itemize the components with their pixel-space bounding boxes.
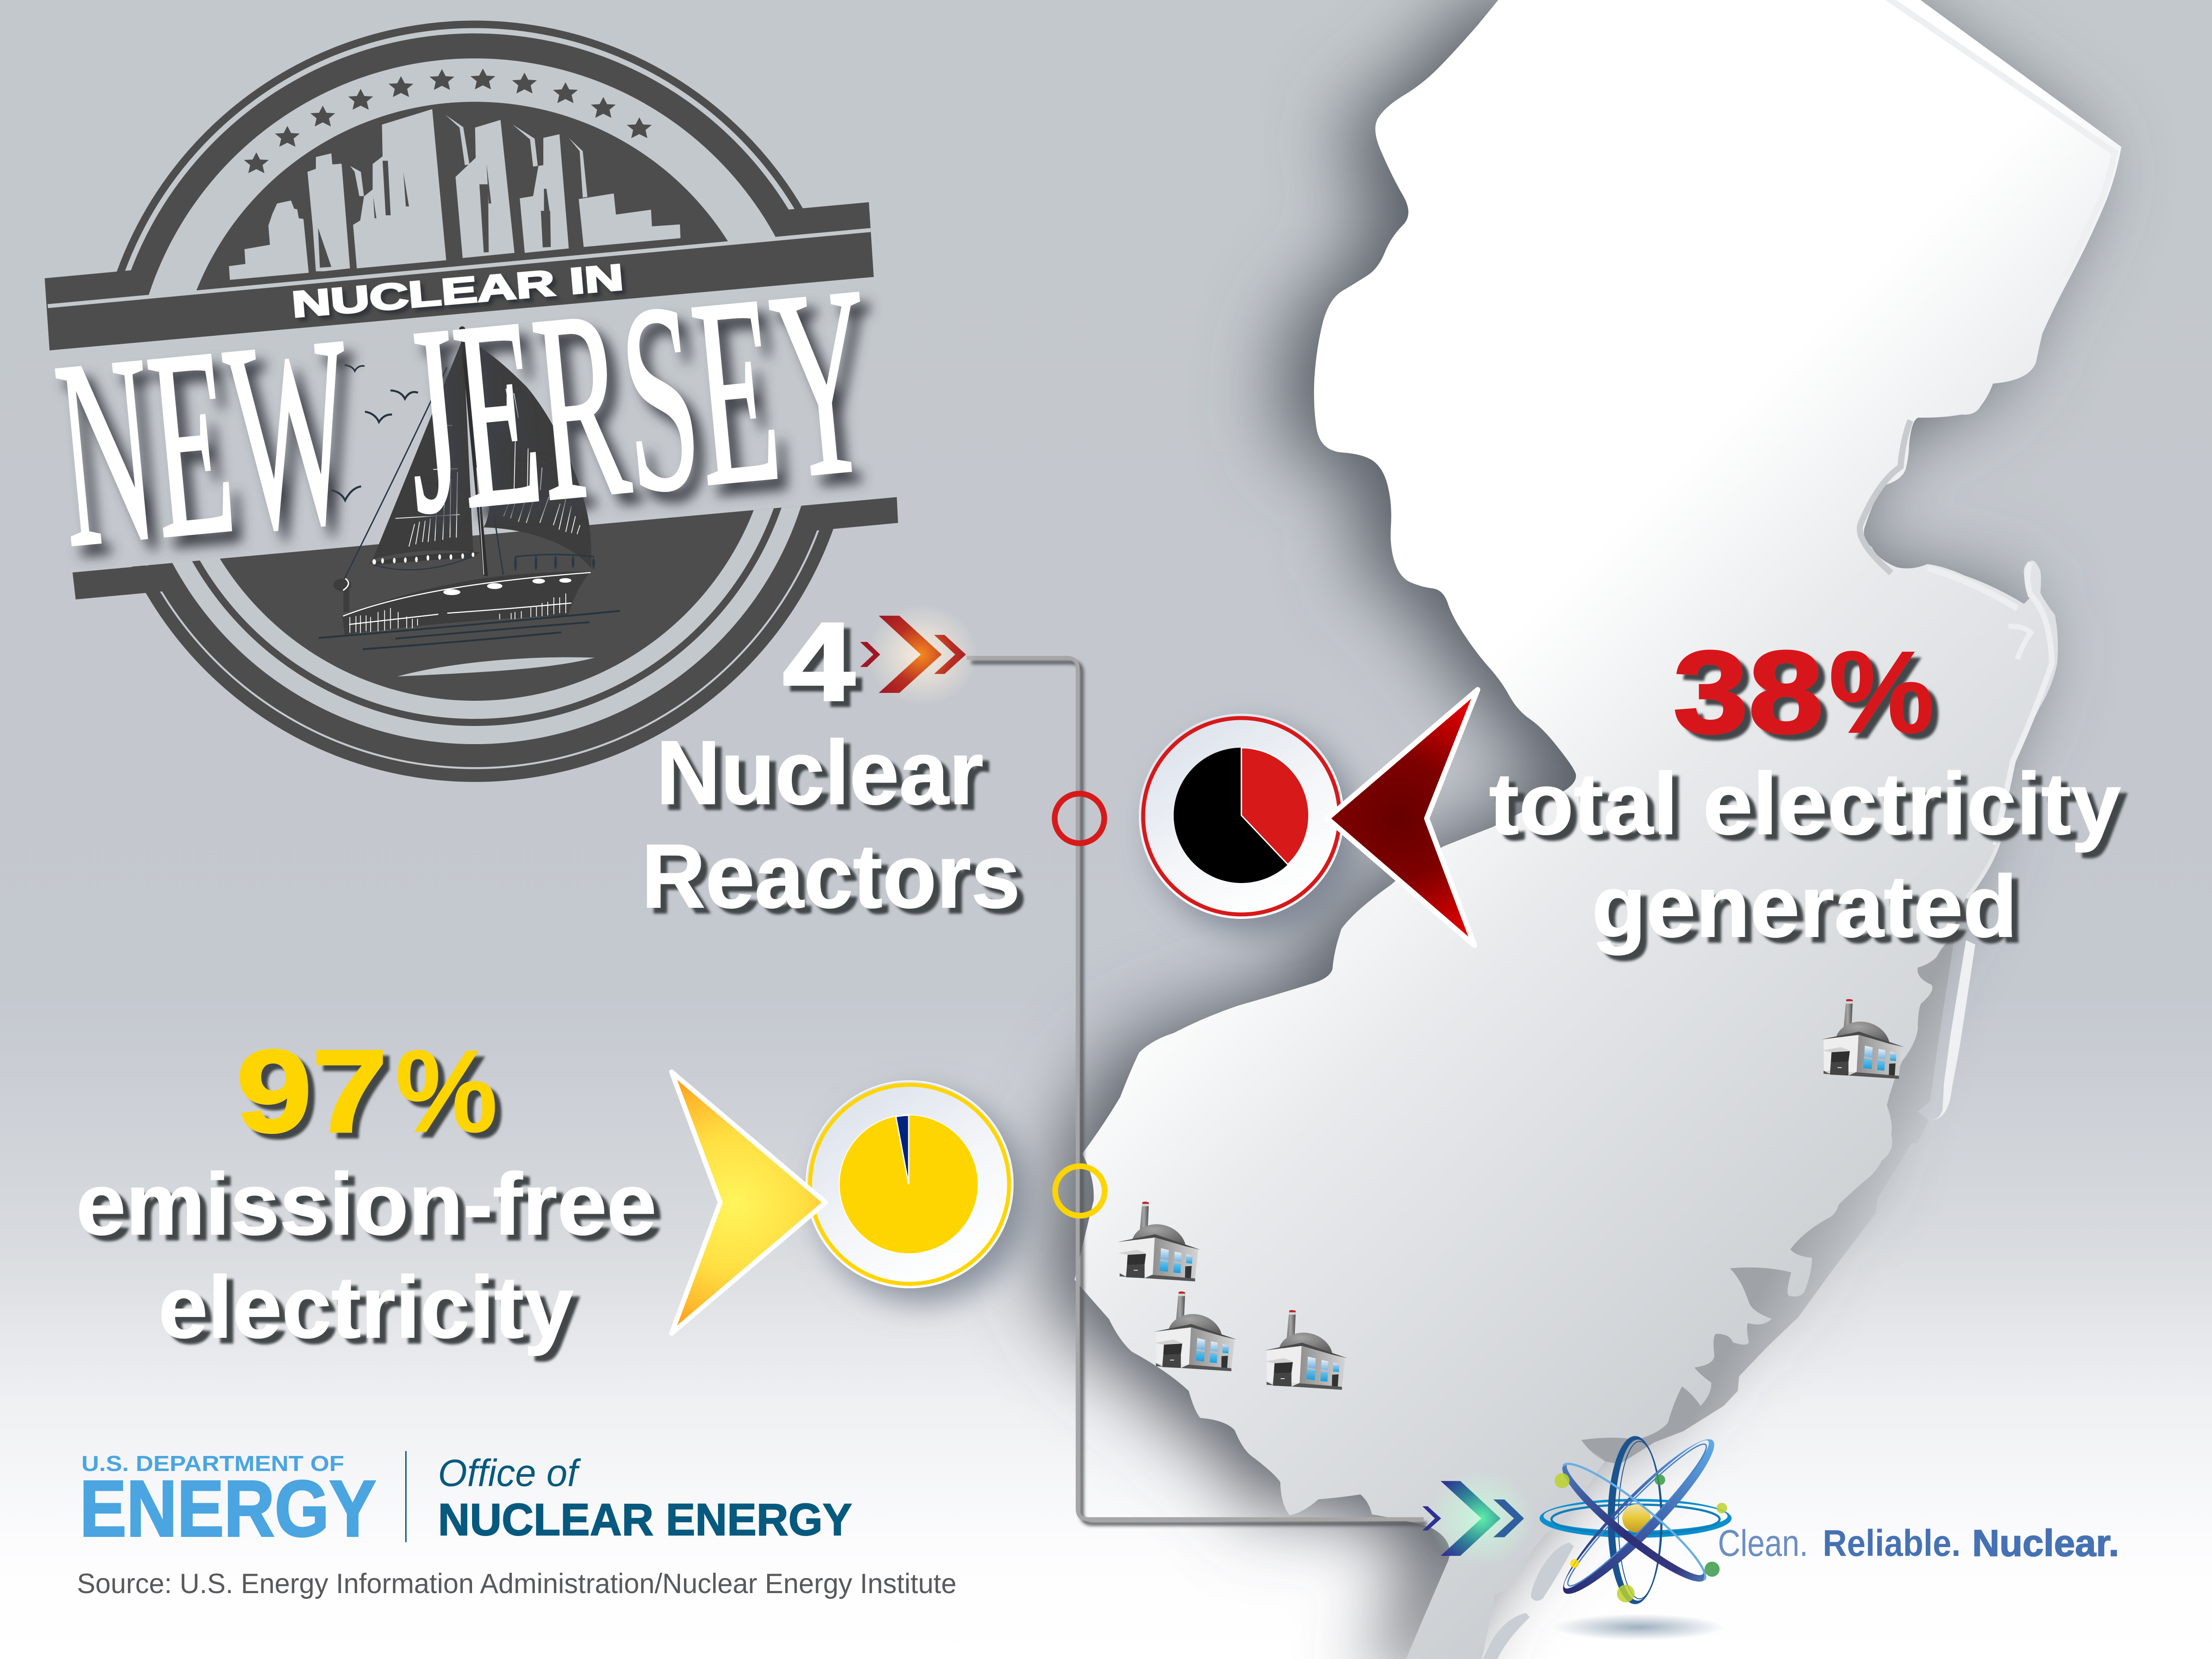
yellow arrow pointer xyxy=(672,1072,826,1333)
stat: 4 Nuclear Reactors: Nuclear xyxy=(656,722,983,823)
connector line with shadow xyxy=(967,658,1427,1524)
mast and rigging xyxy=(461,338,488,576)
banner highlight line xyxy=(48,230,871,306)
Office of Nuclear Energy wordmark: NUCLEAR ENERGY xyxy=(438,1494,852,1545)
reactor icon: Salem 2 xyxy=(1154,1291,1237,1371)
stat: 4 Nuclear Reactors: 4 xyxy=(783,600,855,723)
stat: 38% total electricity generated: total electricity xyxy=(1489,755,2121,853)
yellow ring marker on connector xyxy=(1055,1166,1105,1216)
stat: 4 Nuclear Reactors: Reactors xyxy=(641,826,1020,927)
blue chevrons icon xyxy=(1422,1470,1534,1567)
reactor icon: Oyster Creek xyxy=(1821,999,1905,1079)
U.S. Department of Energy wordmark: U.S. DEPARTMENT OF xyxy=(81,1452,344,1476)
inner disc, upper half xyxy=(132,58,818,744)
southern barrier strips xyxy=(1483,1543,1574,1659)
city skyline xyxy=(229,109,680,280)
banner title: NUCLEAR IN: NUCLEAR IN xyxy=(290,256,625,325)
tagline: Clean. Reliable. Nuclear.: Clean. xyxy=(1718,1522,1808,1564)
map of New Jersey with paper cut-out shadow xyxy=(1044,0,2121,1659)
horizontal orbit xyxy=(1540,1499,1732,1538)
stat: 38% total electricity generated: % xyxy=(1828,627,1935,758)
tagline: Clean. Reliable. Nuclear.: Nuclear. xyxy=(1972,1522,2119,1564)
stat: 97% emission-free electricity: 97 xyxy=(236,1026,388,1157)
water highlight xyxy=(397,657,595,676)
stat: 38% total electricity generated: 38 xyxy=(1673,627,1824,758)
atom ground shadow xyxy=(1552,1614,1725,1640)
pie chart: 38 percent xyxy=(1139,714,1344,919)
hull xyxy=(342,572,591,634)
sails xyxy=(373,338,591,569)
stat: 38% total electricity generated: generated xyxy=(1592,857,2017,955)
red ring marker on connector xyxy=(1055,794,1104,843)
vertical orbit xyxy=(1608,1436,1663,1604)
Office of Nuclear Energy wordmark: Office of xyxy=(438,1452,581,1494)
barrier island strip xyxy=(1931,940,1975,1120)
red arrow pointer xyxy=(1327,690,1478,945)
boom xyxy=(369,552,480,565)
nucleus xyxy=(1622,1504,1651,1532)
diagonal orbit, upper left xyxy=(1551,1451,1716,1594)
tagline: Clean. Reliable. Nuclear.: Reliable. xyxy=(1823,1522,1961,1564)
tagline: Clean. Reliable. Nuclear. xyxy=(1718,1522,2119,1564)
coastal water band between mainland and barrier islands xyxy=(1548,898,1966,1464)
logo badge: Nuclear in New Jersey xyxy=(45,24,898,778)
badge rings, upper half xyxy=(117,20,803,272)
upper banner xyxy=(45,202,874,350)
stat: 97% emission-free electricity: % xyxy=(395,1026,498,1157)
pie chart: 97 percent xyxy=(806,1081,1013,1288)
logo divider xyxy=(405,1451,407,1542)
sailboat xyxy=(319,326,620,649)
birds xyxy=(331,365,418,500)
Office of Nuclear Energy wordmark xyxy=(438,1452,852,1545)
source line: Source: U.S. Energy Information Administration/Nuclear Energy Institute xyxy=(77,1568,956,1599)
stat: 38% total electricity generated xyxy=(1489,627,2121,955)
stars arc xyxy=(244,69,652,173)
diagonal orbit, upper right xyxy=(1550,1426,1728,1607)
railing xyxy=(515,554,594,557)
reactor icon: Salem 1 xyxy=(1118,1202,1201,1281)
U.S. Department of Energy wordmark: ENERGY xyxy=(80,1464,376,1553)
electrons xyxy=(1555,1473,1727,1602)
title: NEW JERSEY: NEW xyxy=(46,280,366,603)
stat: 97% emission-free electricity: electricity xyxy=(158,1258,573,1356)
stat: 97% emission-free electricity xyxy=(76,1026,657,1356)
reactor icon: Hope Creek xyxy=(1264,1310,1348,1390)
pie disc xyxy=(806,1081,1013,1288)
red chevrons icon xyxy=(860,604,978,706)
title: NEW JERSEY: JERSEY xyxy=(393,230,884,569)
stat: 97% emission-free electricity: emission-free xyxy=(76,1155,657,1253)
stat: 4 Nuclear Reactors xyxy=(641,600,1020,927)
atom logo xyxy=(1540,1426,1732,1640)
badge rings and disc, lower half xyxy=(73,27,898,776)
waves xyxy=(319,611,620,649)
pie disc xyxy=(1139,714,1344,919)
